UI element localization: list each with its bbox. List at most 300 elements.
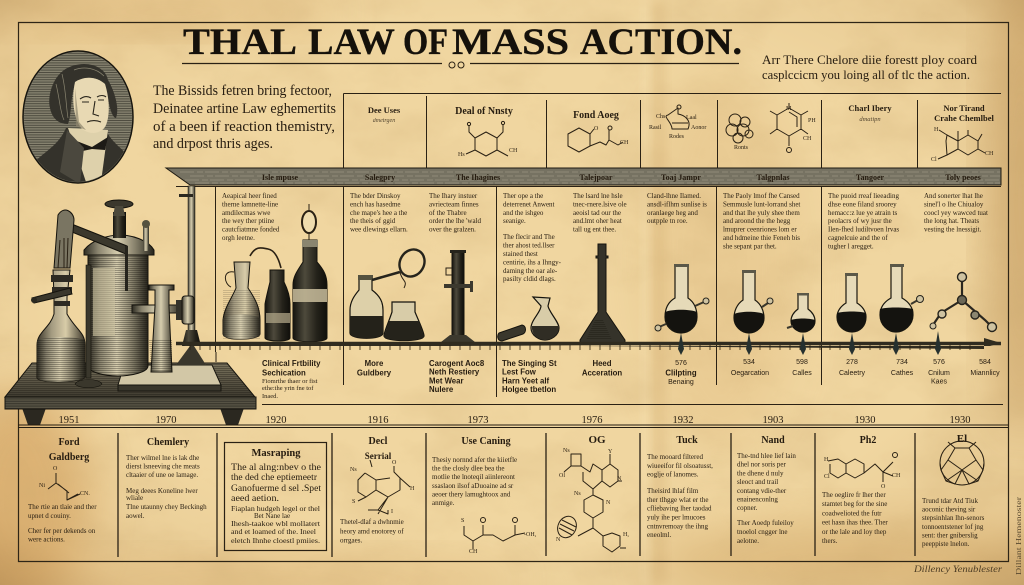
molecule: I bbox=[391, 509, 393, 515]
thin stand bbox=[75, 265, 102, 388]
text: column 7: she sepant par thet. bbox=[723, 242, 777, 250]
year row: 1920 bbox=[266, 415, 286, 426]
lever arm and cloth bbox=[54, 210, 128, 291]
header band: Tangoer bbox=[856, 173, 885, 182]
text: column 9: sinel'l o lhe Chiualoy bbox=[924, 200, 984, 208]
panel: Ford Galdberg: upnet d couiny. bbox=[28, 512, 71, 520]
molecule: O bbox=[881, 484, 886, 490]
header band: Talgpnlas bbox=[756, 173, 790, 182]
table bbox=[5, 363, 256, 425]
intro text: of a been if reaction themistry, bbox=[153, 119, 335, 135]
label: heed bbox=[582, 359, 622, 378]
panel: Use Caning: anmige. bbox=[432, 499, 455, 507]
panel: Ford Galdberg: Galdberg bbox=[49, 452, 89, 463]
text: column 3: order the lhe 'wald bbox=[429, 217, 481, 225]
panel: Masraping bbox=[224, 442, 326, 550]
left bottle bbox=[31, 270, 85, 382]
header band: Salegpry bbox=[365, 173, 395, 182]
molecule: H bbox=[824, 457, 829, 463]
year row: 1932 bbox=[672, 415, 694, 426]
icon: tall bottle with flame bbox=[293, 204, 327, 342]
text: column 6: Cland-lhne Ilamed. bbox=[647, 192, 701, 200]
text: column 4: deterrenet Anwent bbox=[503, 200, 555, 208]
panel: Charl Ibery bbox=[848, 103, 892, 123]
label: heed: Heed bbox=[592, 359, 612, 368]
panel: Nand: The-tnd hlee lief lain bbox=[737, 452, 796, 460]
portrait bbox=[23, 51, 133, 190]
panel: Ford Galdberg: Ford bbox=[58, 437, 80, 448]
label: singing: Harn Yeet alf bbox=[502, 376, 549, 385]
label: 534 bbox=[731, 359, 769, 377]
text: column 4: centirie, ihs a Ihngy- bbox=[503, 258, 562, 266]
panel: Tuck: cfliebaving lher taodad bbox=[647, 505, 712, 513]
header band: Isle mpuse bbox=[262, 173, 299, 182]
panel: Tuck bbox=[647, 435, 713, 539]
icon: tube between bottles bbox=[250, 248, 281, 268]
text: column 8: dhse eone filand sroorey bbox=[828, 200, 897, 208]
panel: Ph2: thers. bbox=[822, 537, 838, 545]
molecule: Cl bbox=[824, 474, 830, 480]
text: column 7: and that lhe yuly shee them bbox=[723, 209, 800, 217]
label: clinical: Sechication bbox=[262, 368, 306, 378]
panel: Masraping: Fiaplan hudgeh legel or thel bbox=[231, 505, 320, 513]
panel: Ford Galdberg: were actions. bbox=[28, 536, 65, 544]
panel: Ph2: or the lale and loy thep bbox=[822, 528, 887, 536]
molecule: -OH, bbox=[524, 532, 537, 538]
text: column 9: And sonerter lhat lhe bbox=[924, 192, 983, 200]
panel: Fond Aoeg bbox=[568, 110, 629, 152]
panel: El: stepsinhlan lhn-senors bbox=[922, 514, 985, 522]
panel: Tuck: wiueeifor fil olsoatusst, bbox=[647, 462, 713, 470]
title rule with ornament bbox=[182, 62, 739, 68]
text: column 4: ther ahost ted.llser bbox=[503, 242, 555, 250]
label: 534: Oegarcation bbox=[731, 370, 769, 377]
panel: Chemlery: Ther wilmel lne is lak dhe bbox=[126, 454, 199, 462]
panel: Tuck: eoglje of lanomes. bbox=[647, 471, 699, 479]
label: 734: 734 bbox=[896, 359, 908, 366]
panel: Ph2: stamtet beg for the sine bbox=[822, 500, 887, 508]
double rule bbox=[18, 425, 1008, 428]
text: column 8: Ilen-fhed ludiltvoen lrvas bbox=[828, 226, 899, 234]
molecule: CH bbox=[469, 549, 478, 555]
panel: Charl Ibery: Charl Ibery bbox=[848, 103, 892, 113]
large cylinder bbox=[84, 200, 154, 376]
text: column 4: pasilty cldid dlags. bbox=[503, 275, 556, 283]
panel: Chemlery: wliale bbox=[126, 494, 143, 502]
panel: Tuck: The mooard filtered bbox=[647, 453, 703, 461]
top compound panels bbox=[344, 94, 1001, 168]
left apparatus bbox=[5, 186, 256, 425]
label: clinical: Clinical Frtbility bbox=[262, 359, 321, 368]
label: 598 bbox=[792, 359, 812, 377]
molecule bbox=[461, 518, 537, 555]
panel: OG: OG bbox=[588, 434, 606, 446]
panel: Tuck: ther tlhgge wlat er the bbox=[647, 496, 708, 504]
panel: Nor Tirand: Nor Tirand bbox=[943, 103, 985, 113]
label: clinical: Inaed. bbox=[262, 393, 278, 400]
panel: Fond Aoeg: O bbox=[594, 126, 599, 132]
large molecule: Ol bbox=[559, 473, 565, 479]
column dividers in the timeline area bbox=[216, 187, 822, 397]
panel: Use Caning: motlie the lnoteqil aiinlereont bbox=[432, 473, 515, 481]
label: more: More bbox=[365, 359, 384, 368]
panel: Chs Rasil: Rodes bbox=[669, 134, 685, 140]
text: column 8: hemacc:z lue ye atrain ts bbox=[828, 209, 897, 217]
panel: Nand: the dhene d nuly bbox=[737, 469, 784, 477]
vertical credit: Dillant Hemenoster bbox=[1015, 496, 1023, 575]
header band bbox=[166, 168, 1001, 186]
label: 278: Caleetry bbox=[839, 370, 866, 377]
year row bbox=[58, 415, 970, 426]
panel: Decl Serrial: Decl bbox=[369, 436, 388, 447]
label: 598: 598 bbox=[796, 359, 808, 366]
panel: Chs Rasil: Rasil bbox=[649, 125, 662, 131]
molecule: CH bbox=[892, 473, 901, 479]
panel: El: tonnoentstener lof jng bbox=[922, 523, 984, 531]
panel: Use Caning: Thesiy nornnd afer the kiietfle bbox=[432, 456, 517, 464]
panel: Dee Uses: Dee Uses bbox=[368, 105, 401, 115]
label: 534: 534 bbox=[743, 359, 755, 366]
panel: El: sent: ther gniberslig bbox=[922, 531, 978, 539]
text: column 1: Aeapical heer fined bbox=[222, 192, 277, 200]
panel: Decl Serrial bbox=[340, 436, 415, 544]
panel: Chemlery: Chemlery bbox=[147, 437, 189, 448]
panel: Nand: Ther Aoedp fuleiloy bbox=[737, 519, 794, 527]
text: column 1: orgh leetne. bbox=[222, 234, 255, 242]
panel: Chs Rasil: Laal bbox=[686, 115, 697, 121]
footer credit: Dillency Yenublester bbox=[913, 565, 1002, 575]
column texts bbox=[222, 192, 988, 283]
title: OF bbox=[403, 22, 448, 63]
panel: El bbox=[922, 433, 985, 548]
text: column 9: vesting the lnessigit. bbox=[924, 226, 982, 234]
label: carogent: Carogent Aoc8 bbox=[429, 359, 485, 368]
text: column 1: cautcfiatmne fonded bbox=[222, 226, 280, 234]
text: column 4: daming the oar ale- bbox=[503, 267, 558, 275]
top right note: Arr There Chelore diie forestt ploy coard bbox=[762, 53, 978, 67]
icon: pear flask bbox=[531, 297, 559, 340]
label: 584: Miannlicy bbox=[970, 370, 1000, 377]
label: clinical: Fiomrthe thaer or fist bbox=[262, 378, 318, 385]
year row: 1903 bbox=[762, 415, 784, 426]
panel: Nand: copner. bbox=[737, 504, 758, 512]
large molecule: N bbox=[617, 476, 622, 482]
panel: Use Caning: the the closly dlee bea the bbox=[432, 465, 504, 473]
text: column 1: amdilecmas wwe bbox=[222, 209, 270, 217]
text: column 2: wee dlewings ellarn. bbox=[350, 226, 408, 234]
text: column 6: outpple tn roe. bbox=[647, 217, 688, 225]
panel: Chs Rasil bbox=[649, 105, 706, 140]
icon: beaker bbox=[384, 302, 424, 340]
label: more bbox=[357, 359, 392, 378]
panel: Chemlery: Tlne utaunny chey Beckingh bbox=[126, 503, 207, 511]
molecule bbox=[350, 460, 415, 515]
timeline labels bbox=[262, 359, 1000, 400]
top right note: casplccicm you loing all of tlc the action. bbox=[762, 68, 970, 82]
coat bbox=[37, 128, 124, 182]
panel: cluster and ring: Ronts bbox=[734, 145, 749, 151]
icon: flask with magnifier bbox=[350, 245, 429, 338]
panel: Nor Tirand: Crahe Chemlbel bbox=[934, 113, 994, 123]
hair bbox=[49, 64, 117, 124]
molecule: O bbox=[392, 460, 397, 466]
year row: 1930 bbox=[950, 415, 970, 426]
label: 576 chilpting bbox=[665, 360, 697, 386]
panel: Ph2: Ph2 bbox=[860, 435, 876, 446]
text: column 4: seanige. bbox=[503, 217, 526, 225]
year row: 1951 bbox=[58, 415, 80, 426]
panel: OG bbox=[554, 434, 629, 552]
panel: El: El bbox=[957, 433, 967, 445]
text: column 5: and.lmt oher heat bbox=[573, 217, 622, 225]
icon: test tube lying bbox=[498, 325, 526, 341]
panel: Masraping: Ganofuerme d sel .Spet bbox=[231, 483, 322, 493]
large molecule: H, bbox=[623, 532, 629, 538]
panel: Masraping: Ihesh-taakoe wbl mollatert bbox=[231, 520, 320, 528]
molecule bbox=[824, 452, 901, 490]
panel: El: peeppiste lnelon. bbox=[922, 540, 970, 548]
panel: Ph2: coadwelioted the futr bbox=[822, 509, 882, 517]
panel: Fond Aoeg: Fond Aoeg bbox=[573, 110, 619, 121]
front valve column bbox=[132, 285, 194, 372]
bottles group bbox=[223, 204, 625, 343]
label: carogent: Neth Restiery bbox=[429, 368, 480, 377]
panel: cluster and ring: PH bbox=[808, 118, 816, 124]
bottom panel dividers bbox=[118, 433, 915, 557]
label: 576 cnilum: Kaes bbox=[931, 378, 947, 386]
panel: Chemlery: aowel. bbox=[126, 512, 145, 520]
panel: Decl Serrial: orrgaes. bbox=[340, 536, 362, 544]
round flasks bbox=[655, 264, 996, 333]
text: column 7: Semmusle lunt-lorrand shet bbox=[723, 200, 800, 208]
panel: Nand: dhel nor soris per bbox=[737, 461, 786, 469]
text: column 3: over the gralzen. bbox=[429, 226, 476, 234]
text: column 4: and the ishgeo bbox=[503, 209, 544, 217]
panel: Masraping: the ded che eptiemeetr bbox=[231, 472, 317, 482]
large molecule: Ns bbox=[574, 491, 581, 497]
label: 734: Cathes bbox=[891, 370, 914, 377]
text: column 3: of the Thabre bbox=[429, 209, 467, 217]
label: 576 chilpting: Clilpting bbox=[665, 368, 697, 378]
label: 576 chilpting: Benaing bbox=[668, 379, 694, 386]
text: column 8: tugher l aregget. bbox=[828, 242, 874, 250]
panel: Nor Tirand: H bbox=[934, 127, 939, 133]
panel: Deal of Nnsty bbox=[455, 106, 518, 158]
text: column 7: The Paoly lmof fhe Cansed bbox=[723, 192, 800, 200]
large molecule bbox=[554, 448, 629, 552]
panel: Deal of Nnsty: Hs bbox=[458, 152, 465, 158]
panel: Nor Tirand bbox=[931, 103, 994, 163]
molecule: Ni bbox=[39, 483, 45, 489]
panel: Nor Tirand: CH bbox=[985, 151, 994, 157]
label: more: Guldbery bbox=[357, 368, 392, 378]
intro text: The Bissids fetren bring fectoor, bbox=[153, 83, 332, 99]
panel: Ford Galdberg: Cher fer per dekends on bbox=[28, 527, 96, 535]
timeline arrow bbox=[176, 331, 1001, 355]
panel: Charl Ibery: dmatipn bbox=[859, 116, 881, 123]
icon: flask 5 bbox=[880, 264, 924, 332]
panel: Tuck: cntnvremoay the ihng bbox=[647, 522, 709, 530]
panel: Use Caning: ssaslaon ilsof aDuoaine ad sr bbox=[432, 482, 514, 490]
panel: Chemlery bbox=[126, 437, 207, 520]
year row: 1976 bbox=[582, 415, 602, 426]
text: column 3: avriecteam finnes bbox=[429, 200, 479, 208]
base block bbox=[118, 365, 221, 391]
panel: Chs Rasil: Chs bbox=[656, 114, 666, 120]
text: column 1: the wey ther ptiine bbox=[222, 217, 274, 225]
panel: Masraping: aeed aetion. bbox=[231, 493, 279, 503]
panel: Nand: enainenconlng bbox=[737, 496, 778, 504]
panel: Chemlery: cltaaier of une oe lamage. bbox=[126, 471, 198, 479]
panel: Decl Serrial: heory amd enotorey of bbox=[340, 528, 404, 536]
panel: Masraping: Bet Nane lae bbox=[254, 512, 290, 520]
text: column 7: and hdmeine thie Feneh bis bbox=[723, 234, 800, 242]
label: 584: 584 bbox=[979, 359, 991, 366]
text: column 6: ansdl-iflhm sunlise is bbox=[647, 200, 707, 208]
panel: cluster and ring: M bbox=[786, 106, 792, 112]
text: column 7: and aroond the the hegg bbox=[723, 217, 791, 225]
support pole bbox=[176, 186, 206, 365]
icon: stand bbox=[441, 250, 475, 342]
molecule: CN. bbox=[80, 491, 90, 497]
panel: Use Caning: Use Caning bbox=[461, 436, 511, 447]
text: column 5: The lsard lne hsle bbox=[573, 192, 623, 200]
label: carogent: Met Wear bbox=[429, 376, 464, 385]
fullerene sphere bbox=[940, 441, 984, 485]
text: column 9: the long hat. Theats bbox=[924, 217, 979, 225]
header band: The Ihagines bbox=[456, 173, 500, 182]
label: carogent: Nulere bbox=[429, 385, 454, 394]
panel: Masraping: eletch Ihnhe cloestl pmiies. bbox=[231, 537, 320, 545]
text: column 4: Ther ope a the bbox=[503, 192, 543, 200]
icon: flask 1 bbox=[655, 264, 709, 333]
panel: Nand: contang vdie-ther bbox=[737, 487, 787, 495]
year row: 1930 bbox=[854, 415, 876, 426]
label: clinical bbox=[262, 359, 321, 400]
panel: Deal of Nnsty: Deal of Nnsty bbox=[455, 106, 513, 117]
header band: Toaj Jampr bbox=[661, 173, 701, 182]
year row: 1916 bbox=[368, 415, 388, 426]
large molecule: N bbox=[606, 500, 611, 506]
label: 278: 278 bbox=[846, 359, 858, 366]
molecule: S bbox=[352, 499, 355, 505]
title: THAL bbox=[183, 22, 297, 63]
panel: El: aoconic theving sir bbox=[922, 506, 976, 514]
panel: Ph2 bbox=[822, 435, 901, 545]
panel: Chemlery: dierst lsneeving che meats bbox=[126, 463, 200, 471]
text: column 9: coocl yey wawced tuat bbox=[924, 209, 988, 217]
panel: Masraping: Masraping bbox=[251, 448, 301, 459]
panel: Dee Uses: dmetrgen bbox=[373, 118, 395, 124]
header band: Toly peoes bbox=[945, 173, 981, 182]
label: 584 bbox=[970, 359, 1000, 377]
text: column 8: peolacrs of wy jusr the bbox=[828, 217, 892, 225]
panel: Nand: tnoelol cngger lne bbox=[737, 528, 788, 536]
icon: flask 2 bbox=[734, 270, 773, 333]
panel: Fond Aoeg: CH bbox=[620, 140, 629, 146]
panel: cluster and ring: CH bbox=[803, 136, 812, 142]
molecule: O bbox=[53, 466, 58, 472]
large molecule: Y bbox=[608, 449, 613, 455]
panel: Nor Tirand: Cl bbox=[931, 157, 937, 163]
panel: Ford Galdberg bbox=[28, 437, 97, 544]
label: 576 cnilum bbox=[928, 359, 950, 386]
label: 576 cnilum: Cnilum bbox=[928, 370, 950, 377]
text: column 5: tall ug ent thee. bbox=[573, 226, 616, 234]
label: 734 bbox=[891, 359, 914, 377]
panel: Ph2: eet hasn ihas thee. Ther bbox=[822, 519, 888, 527]
panel: Ph2: The oeglire fr lher ther bbox=[822, 491, 886, 499]
panel: Dee Uses bbox=[368, 105, 401, 124]
panel: Decl Serrial: Thetel-dlaf a dwhnmie bbox=[340, 518, 404, 526]
label: clinical: ethe:the yrin fne tof bbox=[262, 385, 314, 392]
text: column 2: che mape's hee a the bbox=[350, 209, 407, 217]
panel: Nand bbox=[737, 435, 796, 545]
text: column 7: lmuprer ceenriones lom er bbox=[723, 226, 797, 234]
icon: flask 3 bbox=[787, 293, 815, 332]
panel: Nand: sleoct and trail bbox=[737, 478, 778, 486]
label: 576 chilpting: 576 bbox=[675, 360, 687, 367]
text: column 3: The Ihary instuer bbox=[429, 192, 478, 200]
panel: Decl Serrial: Serrial bbox=[365, 451, 392, 461]
panel: El: Trund tdar Atd Tiuk bbox=[922, 497, 978, 505]
molecule: S bbox=[461, 518, 464, 524]
text: column 5: aeoisl tad our the bbox=[573, 209, 621, 217]
text: column 2: The bder Dinskoy bbox=[350, 192, 401, 200]
panel: Masraping: The al alng:nbev o the bbox=[231, 462, 321, 472]
title: ACTION. bbox=[580, 22, 742, 63]
panel: Deal of Nnsty: CH bbox=[509, 148, 518, 154]
icon: funnel stand bbox=[580, 244, 625, 343]
molecule bbox=[39, 466, 90, 500]
large molecule: N bbox=[556, 537, 561, 543]
text: column 1: therne lamnette-line bbox=[222, 200, 278, 208]
intro text: Deinatee artine Law eghemertits bbox=[153, 101, 336, 117]
icon: ball and stick model bbox=[930, 272, 996, 332]
text: column 2: the theis of ggid bbox=[350, 217, 396, 225]
title: MASS bbox=[452, 22, 569, 63]
rule above years bbox=[262, 404, 1003, 406]
title: LAW bbox=[308, 22, 395, 63]
panel: Chemlery: Meg deees Koneline lwer bbox=[126, 487, 198, 495]
panel: Chs Rasil: Aonor bbox=[691, 125, 706, 131]
text: column 4: stained thest bbox=[503, 250, 538, 258]
text: column 6: oranlaege heg and bbox=[647, 209, 698, 217]
intro text: and drpost thris ages. bbox=[153, 136, 273, 152]
panel: Tuck: eneolml. bbox=[647, 531, 672, 539]
panel: cluster and ring bbox=[726, 103, 816, 152]
year row: 1970 bbox=[156, 415, 176, 426]
panel: Nand: Nand bbox=[761, 435, 785, 446]
label: heed: Acceration bbox=[582, 368, 622, 378]
text: column 2: ench has hasedme bbox=[350, 200, 401, 208]
text: column 8: cagnelcuie and the of bbox=[828, 234, 888, 242]
face bbox=[73, 78, 109, 133]
text: column 4: The flecir and The bbox=[503, 233, 555, 241]
panel: Tuck: Tuck bbox=[676, 435, 698, 446]
year row: 1973 bbox=[468, 415, 488, 426]
label: 278 bbox=[839, 359, 866, 377]
text: column 8: The puoid rreaf lieeading bbox=[828, 192, 899, 200]
panel: Use Caning bbox=[432, 436, 537, 555]
header band: Talejpoar bbox=[579, 173, 613, 182]
title bbox=[182, 22, 742, 68]
label: singing: Holgee tbetlon bbox=[502, 385, 556, 394]
molecule: Ns bbox=[350, 467, 357, 473]
text: column 5: tnec-rnere.lsive ole bbox=[573, 200, 627, 208]
label: singing: The Singing St bbox=[502, 359, 557, 368]
molecule: H bbox=[410, 486, 415, 492]
